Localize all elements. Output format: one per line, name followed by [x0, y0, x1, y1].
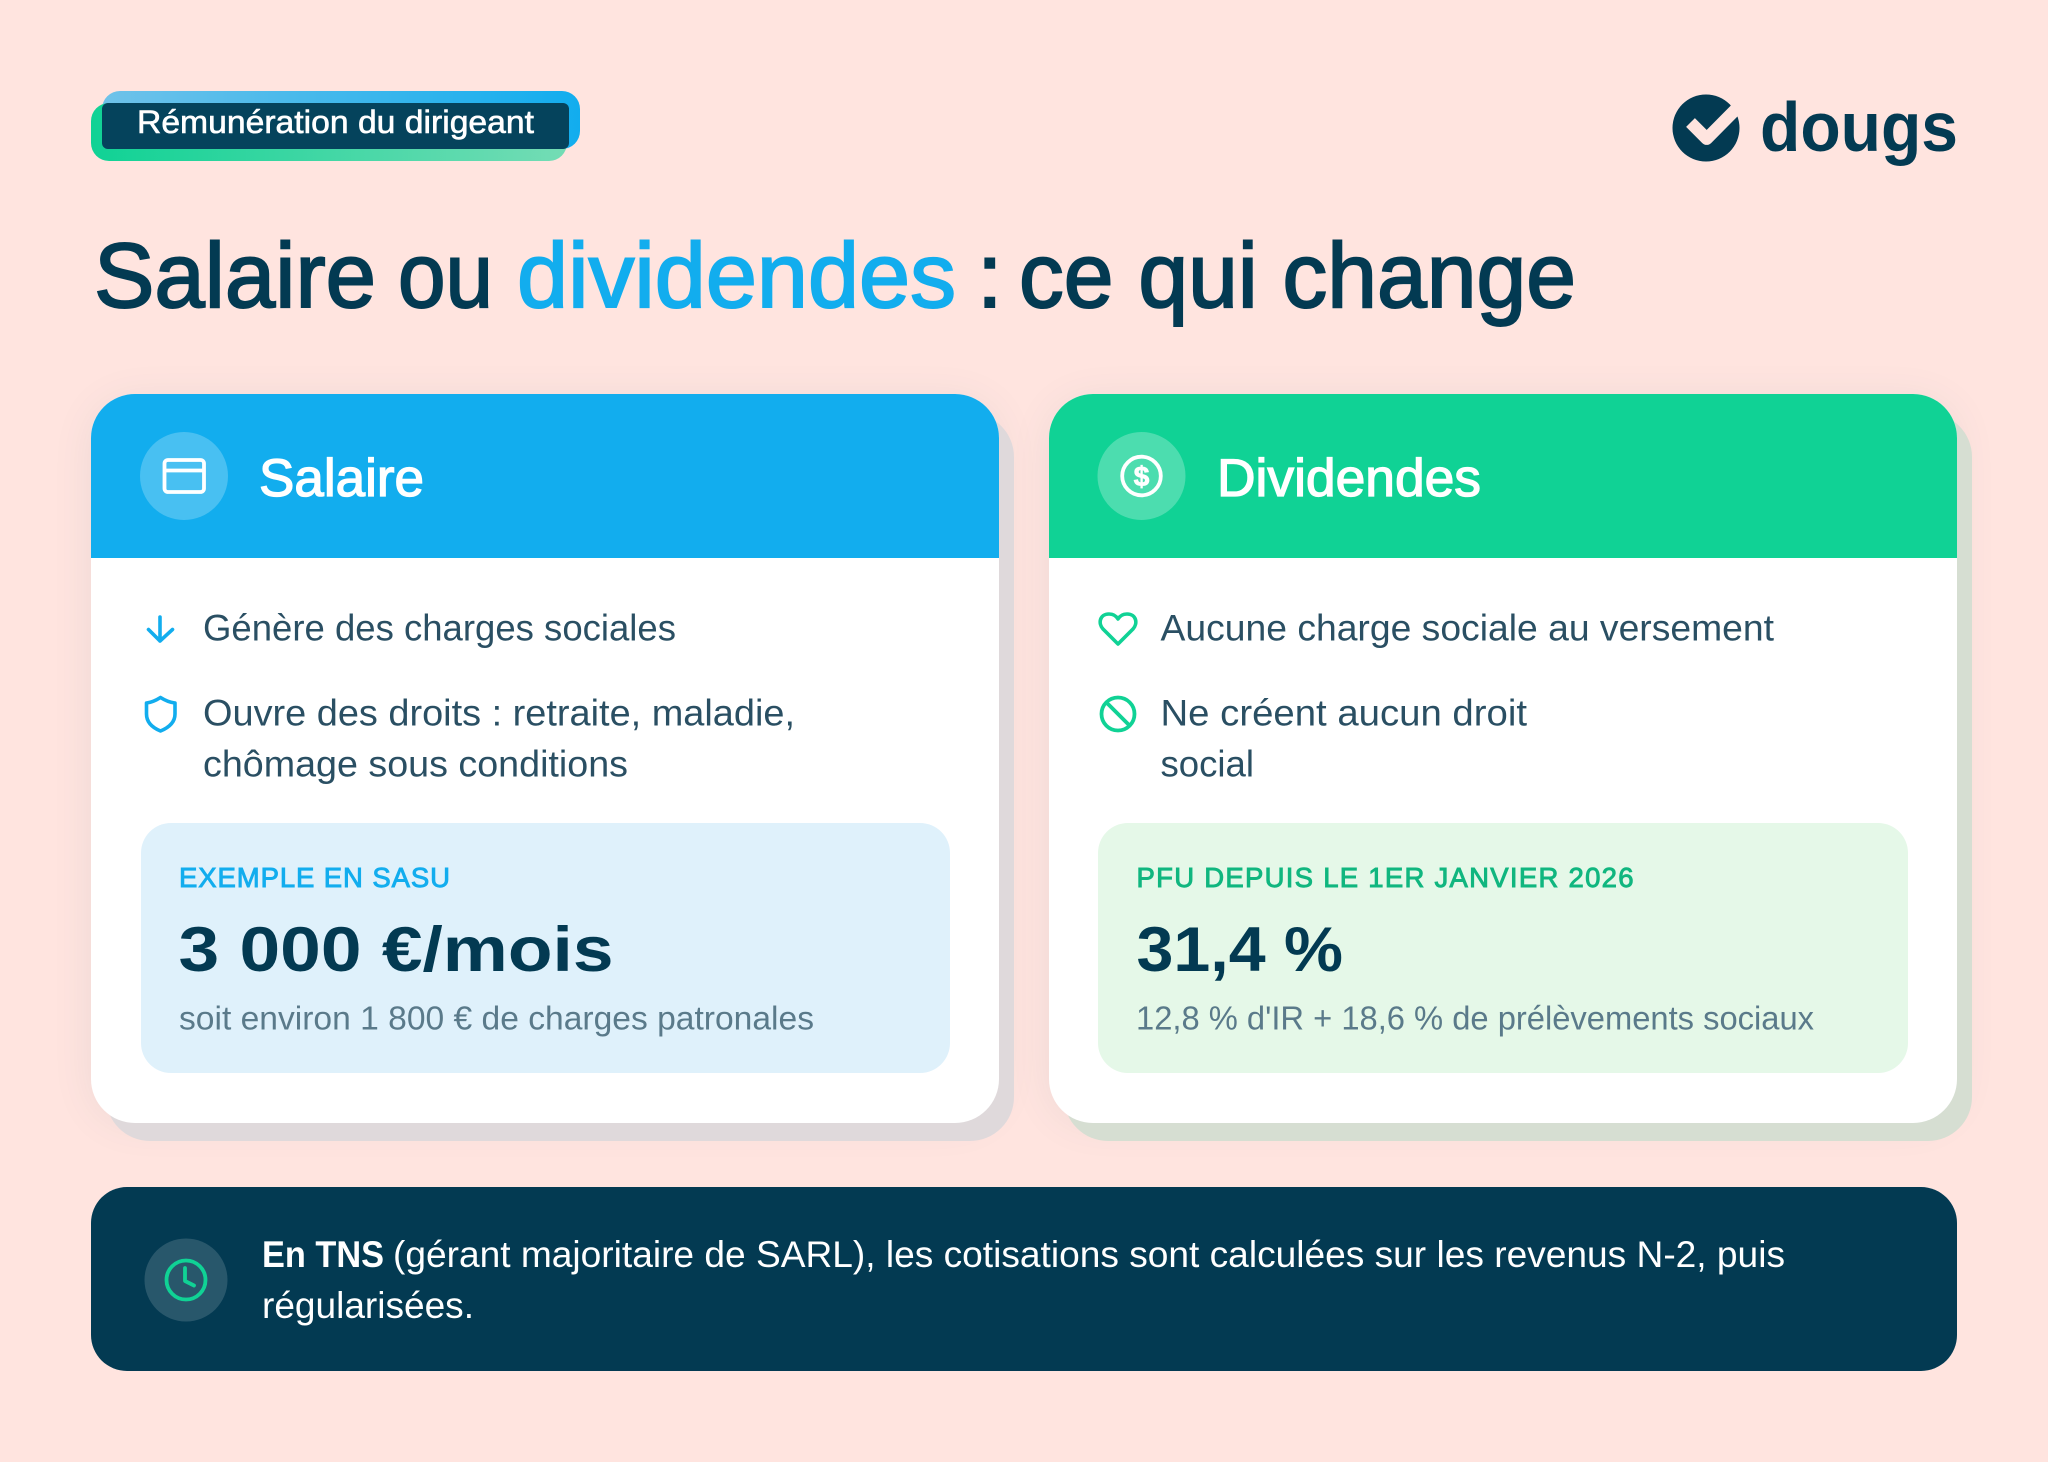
callout: TNS — [91, 1187, 1957, 1371]
salaire header band — [91, 394, 999, 558]
bullet: droits — [203, 692, 795, 784]
dividendes heading: Dividendes — [1217, 449, 1481, 508]
example label: EXEMPLE EN SASU — [179, 862, 450, 893]
panel: dividendes — [1049, 394, 1972, 1141]
panel: salaire — [91, 394, 1014, 1141]
title: ou — [398, 225, 493, 327]
icon: arrow down — [148, 617, 172, 641]
bullet: droits: Ouvre des droits : retraite, maladie, — [203, 692, 795, 734]
bullet: charges: Génère des charges sociales — [203, 608, 676, 648]
example box — [141, 823, 950, 1073]
callout text: (gérant majoritaire de SARL), les cotisations sont calculées sur les revenus N-2, puis — [393, 1234, 1785, 1275]
icon: shield — [146, 698, 175, 731]
icon: clock — [144, 1238, 228, 1322]
category badge — [91, 91, 580, 161]
title: Salaire — [94, 225, 376, 327]
bullet: droit social — [1160, 692, 1528, 784]
logo: dougs: dougs — [1760, 88, 1958, 166]
title: dividendes — [517, 225, 956, 327]
icon: heart — [1100, 614, 1136, 644]
bullet: droits: chômage sous conditions — [203, 744, 628, 784]
pfu label: PFU DEPUIS LE 1ER JANVIER 2026 — [1136, 862, 1634, 893]
callout text: régularisées. — [262, 1285, 474, 1326]
pfu box — [1098, 823, 1908, 1073]
bullet: aucune charge: Aucune charge sociale au versement — [1160, 608, 1775, 648]
icon: ban — [1102, 698, 1134, 730]
category badge: Rémunération du dirigeant — [137, 104, 534, 140]
callout text — [262, 1234, 1785, 1326]
dividendes header band — [1049, 394, 1957, 558]
example note: soit environ 1 800 € de charges patronales — [179, 1000, 814, 1036]
callout text: En TNS — [262, 1234, 384, 1275]
title: : — [977, 225, 1003, 327]
bullet: droit social: social — [1160, 744, 1254, 784]
icon: dollar coin — [1098, 432, 1186, 520]
title: ce qui change — [1019, 225, 1576, 327]
pfu value: 31,4 % — [1136, 915, 1343, 985]
logo: dougs — [1672, 88, 1958, 166]
bullet: droit social: Ne créent aucun droit — [1160, 692, 1528, 734]
example value: 3 000 €/mois — [178, 915, 614, 985]
salaire heading: Salaire — [259, 449, 424, 508]
title — [94, 225, 1576, 327]
pfu note: 12,8 % d'IR + 18,6 % de prélèvements sociaux — [1136, 1000, 1814, 1036]
icon: dollar coin: $ — [1134, 461, 1150, 492]
icon: card — [140, 432, 228, 520]
